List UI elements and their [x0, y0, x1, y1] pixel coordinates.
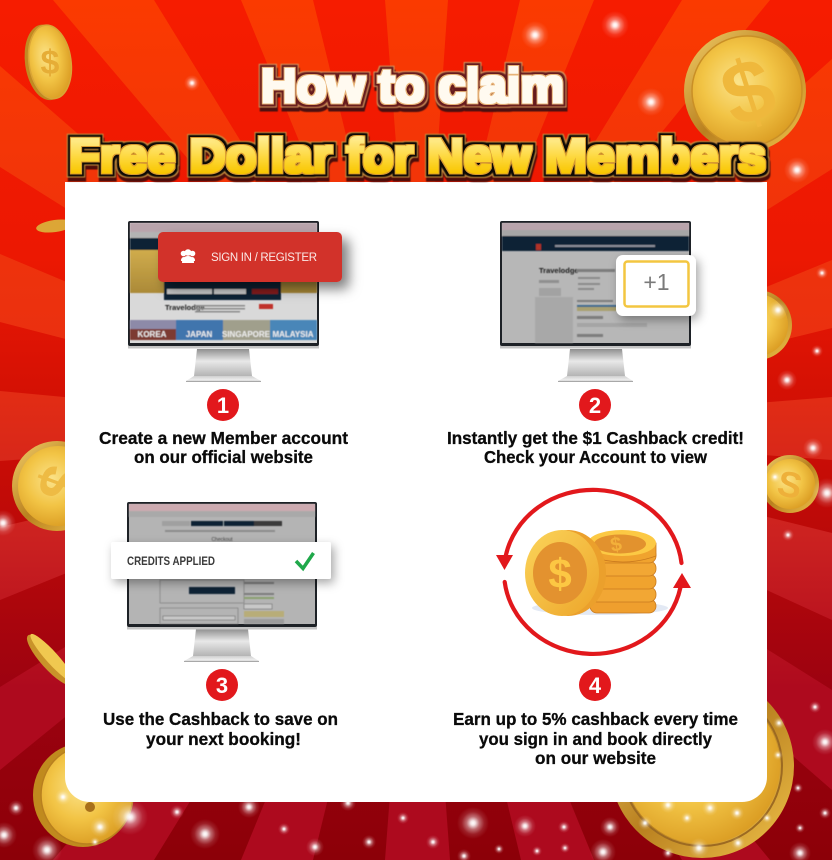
coin: right lower: [761, 455, 819, 513]
step 1 monitor: MALAYSIA: [272, 330, 314, 339]
step 4 text: Earn up to 5% cashback every time: [453, 709, 738, 729]
step 3 text: your next booking!: [146, 729, 301, 749]
step 1 monitor: JAPAN: [186, 330, 212, 339]
step 2 text: Check your Account to view: [484, 447, 707, 467]
step 1 text: [99, 428, 348, 467]
number badge 4: [579, 669, 611, 701]
icon: coin stack: [525, 530, 668, 616]
coin: top left tilted: $: [41, 44, 60, 82]
credits applied callout: CREDITS APPLIED: [127, 556, 215, 568]
icon: check mark: [296, 553, 314, 568]
step 4: [453, 490, 738, 768]
+1 credit callout: +1: [643, 269, 670, 295]
step 1 monitor: SINGAPORE: [222, 330, 271, 339]
step 4 text: [453, 709, 738, 768]
step 1 text: on our official website: [134, 447, 313, 467]
icon: coin stack: $: [609, 533, 624, 557]
step 3 monitor: [127, 502, 317, 662]
icon: coin stack: $: [548, 550, 572, 597]
step 1 text: Create a new Member account: [99, 428, 348, 448]
step 4 text: on our website: [535, 748, 656, 768]
+1 credit callout: [616, 255, 696, 316]
step 3: [103, 502, 338, 749]
step 2: [447, 221, 744, 467]
coin: top right large: $: [710, 37, 787, 146]
step 2 text: Instantly get the $1 Cashback credit!: [447, 428, 744, 448]
number badge 2: 2: [589, 393, 601, 418]
step 2 text: [447, 428, 744, 467]
number badge 2: [579, 389, 611, 421]
coin: thin sliver left top: [35, 217, 75, 235]
step 2 monitor: [500, 221, 691, 382]
panel: white steps card: [65, 182, 767, 802]
step 3 text: Use the Cashback to save on: [103, 709, 338, 729]
coin: bottom right large: [610, 674, 794, 858]
coin: left middle: [12, 441, 102, 531]
number badge 3: [206, 669, 238, 701]
number badge 1: [207, 389, 239, 421]
coin: left middle: $: [24, 457, 100, 513]
coin: right upper: [722, 290, 792, 360]
coin: right lower: S: [774, 462, 806, 507]
coin: top right large: [684, 30, 806, 152]
number badge 3: 3: [216, 673, 228, 698]
step 1 monitor: KOREA: [138, 330, 167, 339]
credits applied callout: [111, 542, 331, 579]
sign in button callout: SIGN IN / REGISTER: [211, 252, 317, 264]
coin: thin tilted left: [21, 629, 79, 691]
step 1 monitor: Travelodge: [165, 303, 205, 312]
icon: people: [181, 249, 195, 263]
step 1 monitor: [128, 221, 319, 382]
step 4 text: you sign in and book directly: [479, 729, 712, 749]
step 1: [99, 221, 348, 467]
step 2 monitor: Travelodge: [539, 266, 579, 275]
number badge 4: 4: [589, 673, 602, 698]
coin: top left tilted: [20, 21, 76, 103]
step 3 monitor: Checkout: [211, 537, 233, 543]
icon: circular arrows: [496, 490, 691, 654]
number badge 1: 1: [217, 393, 229, 418]
step 3 text: [103, 709, 338, 749]
title: Free Dollar for New Members: Free Dollar for New Members: [69, 129, 766, 182]
sign in button callout: [158, 232, 342, 282]
title: How to claim: How to claim: [261, 59, 564, 112]
coin: bottom left: [33, 743, 133, 847]
